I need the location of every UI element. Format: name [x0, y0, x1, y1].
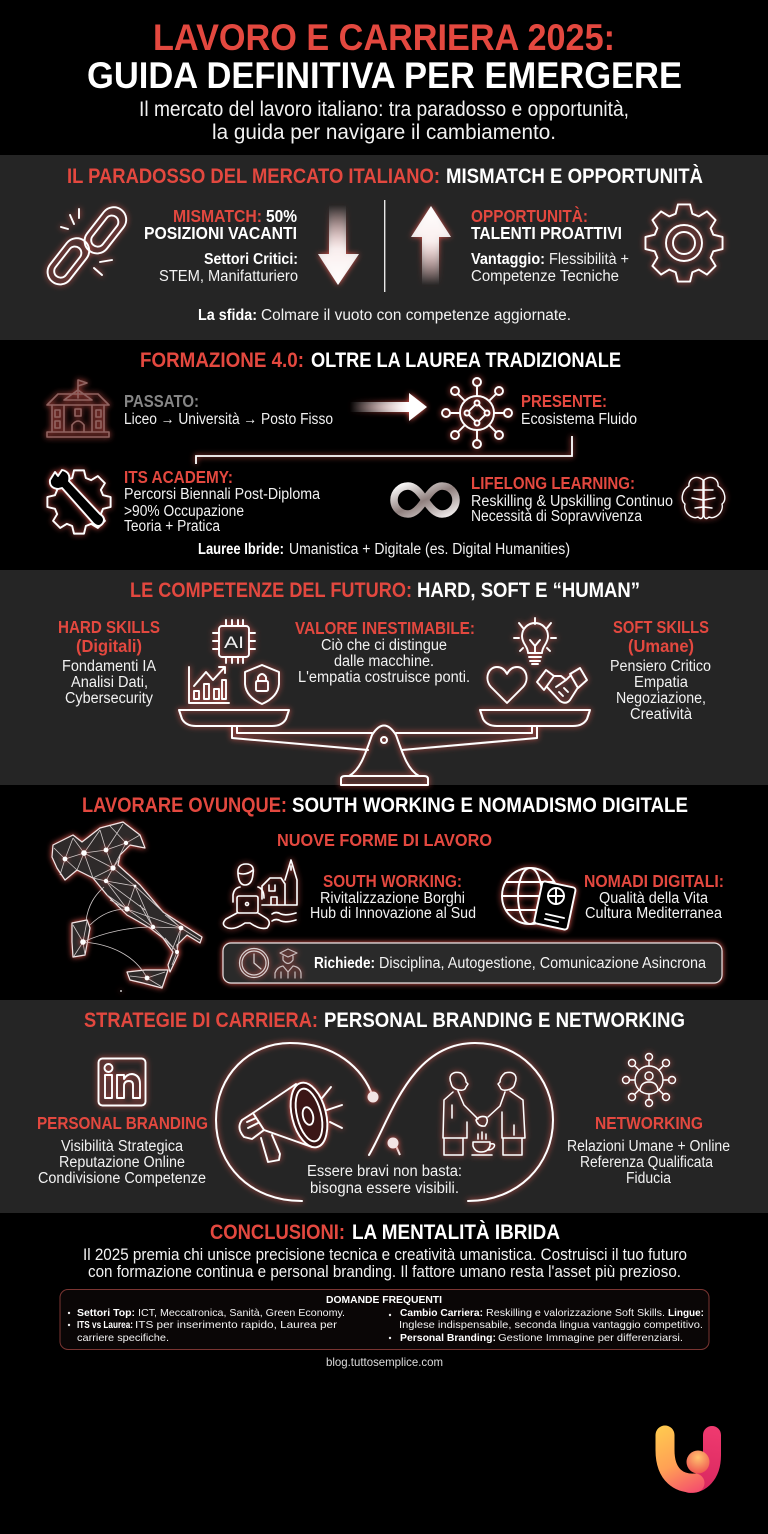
text: south working: Hub di Innovazione al Sud — [310, 905, 476, 922]
icon: handshake — [537, 668, 587, 703]
text: conclusion paragraph — [83, 1246, 687, 1281]
faq left column: ITS per inserimento rapido, Laurea per — [135, 1319, 338, 1331]
icon: brain — [682, 478, 725, 518]
text: soft skills: Creatività — [630, 706, 692, 723]
faq right column: Personal Branding: — [400, 1332, 496, 1344]
text: passato — [124, 391, 333, 428]
text: opportunita: Vantaggio: — [471, 251, 545, 268]
text: essere bravi: Essere bravi non basta: — [307, 1163, 462, 1180]
heading — [82, 794, 688, 817]
text: richiede: Richiede: — [314, 955, 375, 972]
icon: shield — [245, 665, 279, 704]
faq left column — [68, 1307, 345, 1344]
text: nomadi digitali — [584, 871, 724, 922]
heading — [210, 1221, 560, 1244]
heading — [84, 1009, 685, 1032]
map: italy network — [52, 822, 202, 992]
title — [87, 17, 682, 96]
text: its academy: ITS ACADEMY: — [124, 467, 233, 487]
text: hard skills: (Digitali) — [76, 636, 142, 656]
icon: networking person — [622, 1054, 676, 1106]
heading: MISMATCH E OPPORTUNITÀ — [446, 165, 703, 188]
text: soft skills: Negoziazione, — [616, 690, 706, 707]
callout: la sfida: Colmare il vuoto con competenze aggiornate. — [261, 307, 571, 324]
icon: network — [442, 378, 512, 448]
source: blog.tuttosemplice.com — [326, 1355, 443, 1369]
text: valore inestimabile — [295, 618, 475, 686]
arrow up — [411, 206, 451, 285]
text: personal branding — [37, 1113, 208, 1187]
icon: balance scale — [179, 710, 590, 785]
text: south working: Rivitalizzazione Borghi — [320, 890, 465, 907]
heading: OLTRE LA LAUREA TRADIZIONALE — [311, 349, 621, 372]
faq right column: Inglese indispensabile, seconda lingua vantaggio competitivo. — [399, 1319, 703, 1331]
text: conclusion paragraph: con formazione continua e personal branding. Il fattore umano resta l'asset più prezioso. — [88, 1263, 681, 1281]
text: soft skills: Pensiero Critico — [610, 658, 711, 675]
arrow down — [318, 205, 359, 285]
heading: LAVORARE OVUNQUE: — [82, 794, 287, 817]
text: soft skills: (Umane) — [628, 636, 694, 656]
text: personal branding: Condivisione Competenze — [38, 1170, 206, 1187]
icon: wrench and gear — [47, 470, 111, 534]
subtitle — [139, 98, 629, 144]
text: valore inestimabile: VALORE INESTIMABILE: — [295, 618, 475, 638]
heading: IL PARADOSSO DEL MERCATO ITALIANO: — [67, 165, 440, 188]
text: lifelong learning: Reskilling & Upskilling Continuo — [471, 493, 673, 510]
text: soft skills: Empatia — [634, 674, 688, 691]
icon: broken chain — [43, 202, 131, 289]
icon: infinity — [394, 486, 456, 514]
icon: university building — [47, 380, 109, 437]
text: presente — [521, 391, 637, 428]
text: south working: SOUTH WORKING: — [323, 871, 462, 891]
faq left column: carriere specifiche. — [77, 1332, 169, 1344]
text: opportunita: Competenze Tecniche — [471, 268, 619, 285]
text: conclusion paragraph: Il 2025 premia chi unisce precisione tecnica e creatività umanistica. Costruisci il tuo futuro — [83, 1246, 687, 1264]
faq right column — [389, 1307, 704, 1344]
text: its academy — [124, 467, 320, 535]
heading: CONCLUSIONI: — [210, 1221, 345, 1244]
text: its academy: Percorsi Biennali Post-Diploma — [124, 486, 320, 503]
callout: richiede — [223, 943, 722, 983]
text: soft skills: SOFT SKILLS — [613, 617, 709, 637]
text: personal branding: PERSONAL BRANDING — [37, 1113, 208, 1133]
heading: STRATEGIE DI CARRIERA: — [84, 1009, 318, 1032]
text: nomadi digitali: NOMADI DIGITALI: — [584, 871, 724, 891]
arrow: passato to presente — [350, 393, 427, 421]
icon: linkedin — [98, 1058, 146, 1106]
text: hard skills: Analisi Dati, — [71, 674, 148, 691]
heading — [130, 579, 640, 602]
header — [87, 17, 682, 144]
icon: light bulb — [514, 618, 556, 664]
text: hard skills — [58, 617, 160, 707]
text: valore inestimabile: dalle macchine. — [334, 653, 434, 670]
text: mismatch: 50% — [266, 206, 297, 226]
heading — [140, 349, 621, 372]
subtitle: la guida per navigare il cambiamento. — [212, 121, 556, 144]
text: networking — [567, 1113, 730, 1187]
icon: clock — [240, 948, 268, 978]
heading: PERSONAL BRANDING E NETWORKING — [324, 1009, 685, 1032]
faq right column: Lingue: — [668, 1307, 704, 1319]
text: personal branding: Visibilità Strategica — [61, 1138, 183, 1155]
panel: domande frequenti — [60, 1290, 709, 1350]
panel: formazione 4.0 — [47, 349, 725, 558]
text: hard skills: HARD SKILLS — [58, 617, 160, 637]
text: lifelong learning: LIFELONG LEARNING: — [471, 473, 635, 493]
title: GUIDA DEFINITIVA PER EMERGERE — [87, 55, 682, 96]
subtitle: Il mercato del lavoro italiano: tra paradosso e opportunità, — [139, 98, 629, 121]
text: lifelong learning: Necessità di Sopravvivenza — [471, 508, 642, 525]
text: lauree ibride: Umanistica + Digitale (es. Digital Humanities) — [289, 541, 570, 558]
panel: conclusioni — [60, 1221, 709, 1369]
text: richiede: Disciplina, Autogestione, Comunicazione Asincrona — [379, 955, 706, 972]
icon: graduate — [275, 949, 301, 978]
icon: heart — [487, 667, 527, 703]
divider — [384, 200, 385, 292]
panel: competenze del futuro — [58, 579, 711, 785]
text: valore inestimabile: Ciò che ci distingue — [321, 637, 447, 654]
arrow: connector — [196, 436, 572, 464]
text: presente: Ecosistema Fluido — [521, 411, 637, 428]
icon: remote worker in village — [223, 860, 297, 928]
icon: business handshake with coffee — [443, 1072, 525, 1155]
diagram: infinity loop — [216, 1043, 553, 1201]
faq right column: Gestione Immagine per differenziarsi. — [498, 1332, 683, 1344]
text: mismatch: MISMATCH: — [173, 206, 262, 226]
faq left column: Settori Top: — [77, 1307, 135, 1319]
text: opportunita: OPPORTUNITÀ: — [471, 205, 588, 226]
text: opportunita: TALENTI PROATTIVI — [471, 223, 622, 243]
text: networking: Fiducia — [626, 1170, 671, 1187]
heading: SOUTH WORKING E NOMADISMO DIGITALE — [292, 794, 688, 817]
text: passato: Liceo → Università → Posto Fisso — [124, 411, 333, 428]
heading: FORMAZIONE 4.0: — [140, 349, 304, 372]
callout: la sfida: La sfida: — [198, 307, 257, 324]
icon: AI chip — [213, 620, 255, 663]
sub-heading: NUOVE FORME DI LAVORO — [277, 830, 492, 850]
heading: LA MENTALITÀ IBRIDA — [352, 1221, 560, 1244]
text: lauree ibride: Lauree Ibride: — [198, 541, 284, 558]
text: lauree ibride — [198, 541, 570, 558]
text: its academy: >90% Occupazione — [124, 503, 244, 520]
panel: strategie di carriera — [37, 1009, 730, 1201]
text: lifelong learning — [471, 473, 673, 525]
text: mismatch — [144, 206, 298, 285]
heading: LE COMPETENZE DEL FUTURO: — [130, 579, 412, 602]
faq left column: ICT, Meccatronica, Sanità, Green Economy. — [138, 1307, 345, 1319]
text: passato: PASSATO: — [124, 391, 199, 411]
text: essere bravi — [307, 1163, 462, 1197]
text: opportunita: Flessibilità + — [549, 251, 629, 268]
title: LAVORO E CARRIERA 2025: — [153, 17, 615, 58]
heading: HARD, SOFT E “HUMAN” — [417, 579, 640, 602]
faq right column: Reskilling e valorizzazione Soft Skills. — [486, 1307, 665, 1319]
heading — [67, 165, 703, 188]
text: mismatch: Settori Critici: — [204, 251, 298, 268]
text: AI chip label: AI — [224, 633, 244, 652]
faq right column: Cambio Carriera: — [400, 1307, 483, 1319]
icon: logo — [665, 1435, 712, 1484]
icon: gear — [645, 204, 723, 282]
text: mismatch: POSIZIONI VACANTI — [144, 223, 297, 243]
text: nomadi digitali: Cultura Mediterranea — [585, 905, 722, 922]
text: personal branding: Reputazione Online — [59, 1154, 185, 1171]
text: soft skills — [610, 617, 711, 723]
text: networking: Referenza Qualificata — [580, 1154, 713, 1171]
icon: megaphone — [239, 1079, 342, 1162]
text: networking: NETWORKING — [595, 1113, 703, 1133]
text: opportunita — [471, 205, 629, 285]
text: networking: Relazioni Umane + Online — [567, 1138, 730, 1155]
text: hard skills: Fondamenti IA — [62, 658, 157, 675]
text: south working — [310, 871, 476, 922]
panel: lavorare ovunque — [52, 794, 724, 992]
text: nomadi digitali: Qualità della Vita — [599, 890, 708, 907]
text: mismatch: STEM, Manifatturiero — [159, 268, 298, 285]
icon: bar chart — [189, 667, 229, 703]
text: valore inestimabile: L'empatia costruisce ponti. — [298, 669, 470, 686]
faq left column: ITS vs Laurea: — [77, 1319, 133, 1331]
faq title: DOMANDE FREQUENTI — [326, 1294, 442, 1306]
panel: paradosso del mercato — [43, 165, 723, 324]
text: presente: PRESENTE: — [521, 391, 607, 411]
icon: globe and passport — [502, 868, 576, 930]
text: essere bravi: bisogna essere visibili. — [310, 1180, 459, 1197]
text: its academy: Teoria + Pratica — [124, 518, 220, 535]
text: hard skills: Cybersecurity — [65, 690, 153, 707]
